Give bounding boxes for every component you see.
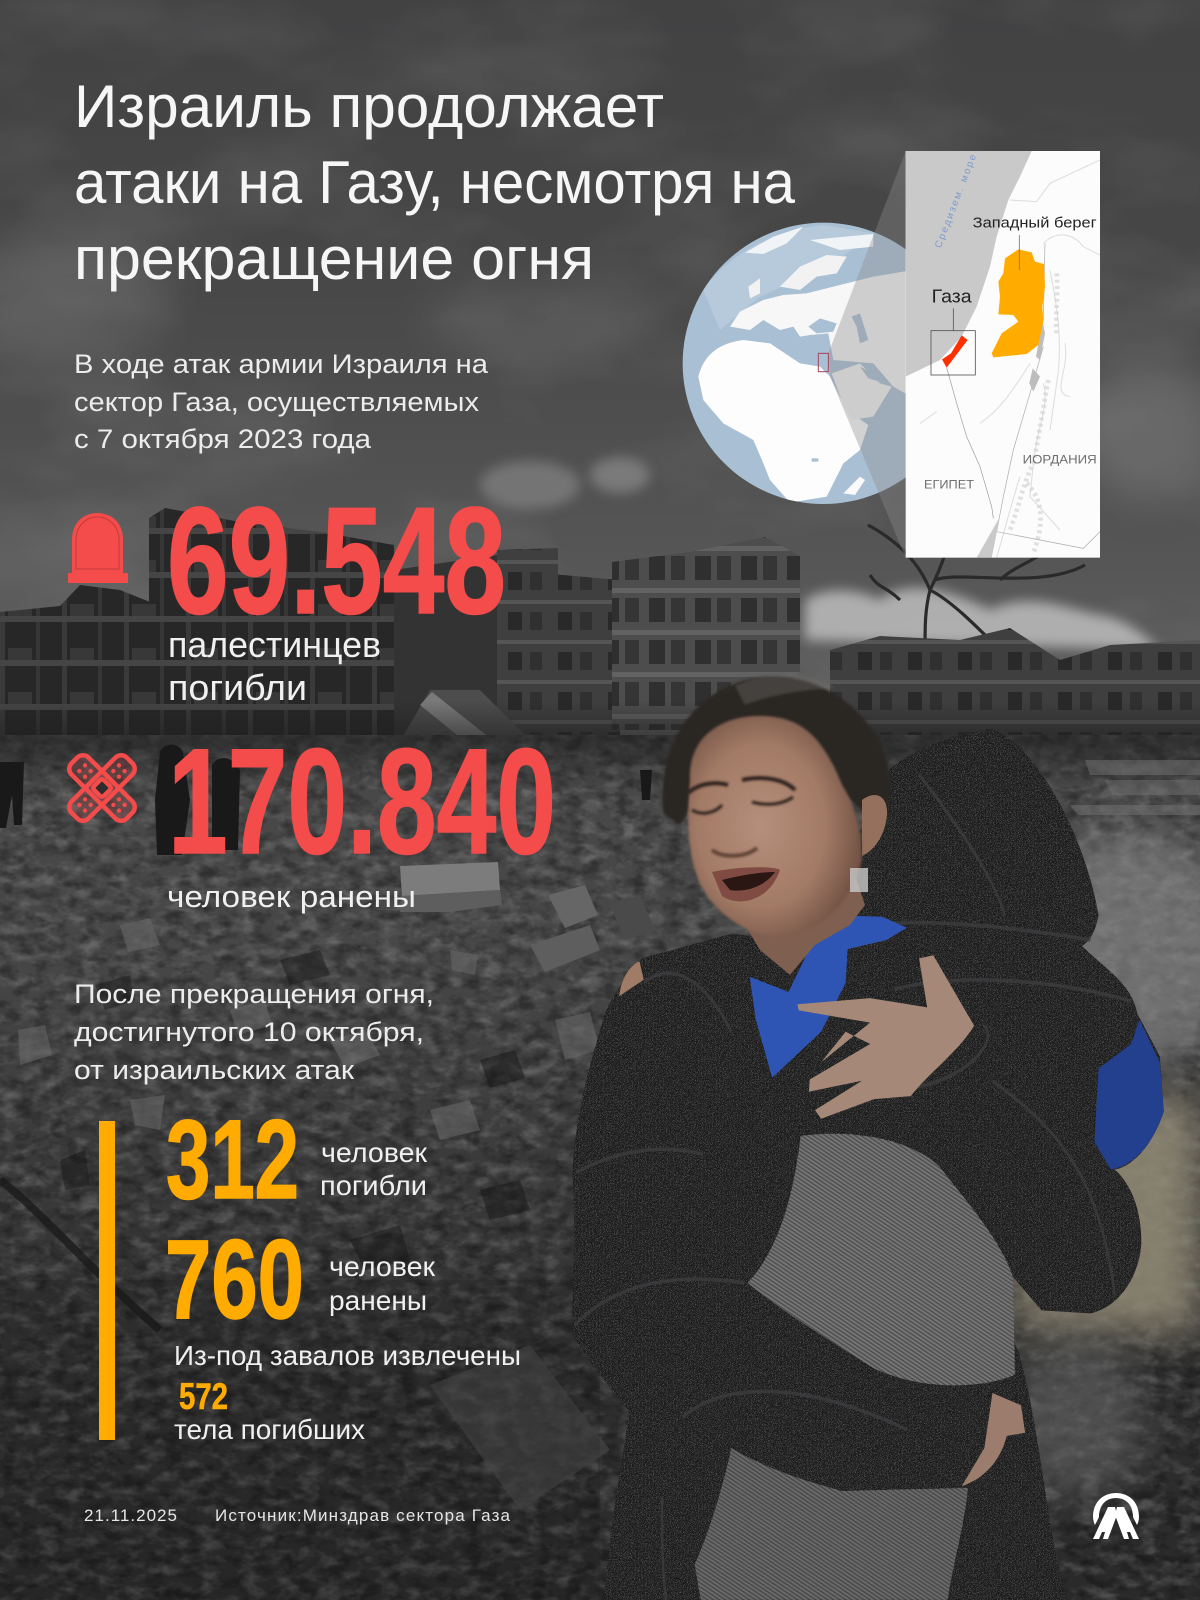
West Bank xyxy=(992,249,1045,357)
title: прекращение огня xyxy=(74,225,594,292)
concrete slab xyxy=(400,862,500,896)
people standing in the rubble xyxy=(0,744,652,855)
title: атаки на Газу, несмотря на xyxy=(74,149,796,216)
map panel xyxy=(906,151,1100,558)
stat: 312 killed: 312 xyxy=(166,1097,299,1222)
stat: 572 bodies recovered: 572 xyxy=(179,1376,228,1417)
coat folds xyxy=(574,775,1131,1600)
Britain xyxy=(748,278,760,298)
stat: 760 wounded: человек xyxy=(329,1251,436,1282)
left ruins xyxy=(0,585,190,745)
Arabia xyxy=(832,363,892,420)
Mediterranean Sea xyxy=(906,151,1032,377)
stat: 572 bodies recovered xyxy=(174,1340,521,1445)
stat: 572 bodies recovered: Из-под завалов извлечены xyxy=(174,1340,521,1371)
map labels: ИОРДАНИЯ xyxy=(1023,452,1097,466)
tree xyxy=(868,520,1085,650)
stat: 69.548 killed: палестинцев xyxy=(168,624,381,665)
map labels: Западный берег xyxy=(973,216,1097,232)
child's corduroy trousers, lower xyxy=(695,1448,968,1600)
ear xyxy=(862,795,887,856)
face xyxy=(688,716,862,936)
date and source: Источник:Минздрав сектора Газа xyxy=(215,1506,511,1525)
ceasefire text: После прекращения огня, xyxy=(74,979,434,1009)
terraces, far right xyxy=(1070,760,1200,815)
Persian Gulf xyxy=(860,366,878,381)
ground xyxy=(0,735,1200,1600)
small hand on shoulder xyxy=(619,961,644,996)
stat: 312 killed: погибли xyxy=(320,1170,427,1201)
hair xyxy=(662,676,891,830)
locator rectangle xyxy=(818,353,828,372)
coat and hood silhouette xyxy=(572,729,1164,1600)
Caspian Sea xyxy=(852,313,868,343)
collapsed slabs xyxy=(395,690,540,750)
Africa xyxy=(698,340,868,503)
main left building xyxy=(149,508,394,745)
mouth xyxy=(712,867,780,901)
panel leader lines and box xyxy=(931,235,1019,375)
map: globe with zoom cone and locator xyxy=(680,151,1100,558)
hand under child xyxy=(962,1393,1025,1486)
stat: 760 wounded: ранены xyxy=(329,1285,427,1316)
logo: AA xyxy=(1093,1493,1139,1539)
stat: 760 wounded xyxy=(165,1217,436,1342)
Gulf of Aqaba xyxy=(977,517,1000,558)
blue sleeve at back xyxy=(1094,1020,1164,1170)
ceasefire text: от израильских атак xyxy=(74,1055,354,1085)
stat: 170.840 wounded xyxy=(167,717,556,914)
icon: gravestone xyxy=(68,513,128,583)
title xyxy=(74,73,796,292)
intro text: В ходе атак армии Израиля на xyxy=(74,349,489,379)
far right ruins xyxy=(830,628,1200,745)
date and source: 21.11.2025 xyxy=(84,1506,177,1525)
borders xyxy=(947,368,993,518)
stat: 69.548 killed: погибли xyxy=(168,667,307,708)
neck xyxy=(745,860,865,975)
photo: woman carrying a child xyxy=(572,674,1164,1600)
intro text xyxy=(74,349,489,454)
earring xyxy=(850,868,868,892)
haze on the right xyxy=(1020,830,1200,1070)
icon: crossed bandages xyxy=(47,733,157,843)
eyes, brows, nose xyxy=(688,778,795,856)
map labels xyxy=(924,153,1097,491)
Arctic islands xyxy=(745,227,873,254)
title: Израиль продолжает xyxy=(74,73,664,140)
broken blocks xyxy=(548,885,598,928)
child's corduroy trousers, upper xyxy=(748,1134,1015,1385)
stat: 69.548 killed xyxy=(167,476,506,708)
zoom cone xyxy=(828,151,906,558)
Madagascar xyxy=(843,477,865,495)
terrain xyxy=(920,160,1100,558)
dark debris band along the horizon xyxy=(0,700,1200,790)
intro text: с 7 октября 2023 года xyxy=(74,424,372,454)
ceasefire text: достигнутого 10 октября, xyxy=(74,1017,424,1047)
blue sleeve at collar xyxy=(750,915,907,1078)
hand holding child xyxy=(797,955,974,1119)
stat: 760 wounded: 760 xyxy=(165,1217,304,1342)
centre terrace building xyxy=(551,574,620,745)
Black Sea xyxy=(808,318,837,333)
ceasefire text xyxy=(74,979,434,1085)
mid building xyxy=(394,555,497,745)
Dead Sea xyxy=(1036,322,1045,360)
globe xyxy=(682,222,906,504)
map labels: Средизем. море xyxy=(933,153,979,250)
stat: 572 bodies recovered: тела погибших xyxy=(174,1414,365,1445)
grey hair highlight xyxy=(735,674,835,705)
right tower xyxy=(612,537,800,730)
stat: 170.840 wounded: человек ранены xyxy=(167,879,416,914)
Europe and Asia xyxy=(730,271,906,394)
amber vertical bar xyxy=(99,1121,115,1440)
date and source xyxy=(84,1506,511,1525)
Scandinavia xyxy=(780,255,847,290)
stat: 312 killed: человек xyxy=(321,1137,428,1168)
map labels: Газа xyxy=(932,285,973,306)
stat: 170.840 wounded: 170.840 xyxy=(168,717,556,885)
map labels: ЕГИПЕТ xyxy=(924,477,975,491)
stat: 69.548 killed: 69.548 xyxy=(167,476,506,646)
Gaza Strip xyxy=(942,335,968,368)
intro text: сектор Газа, осуществляемых xyxy=(74,387,480,417)
